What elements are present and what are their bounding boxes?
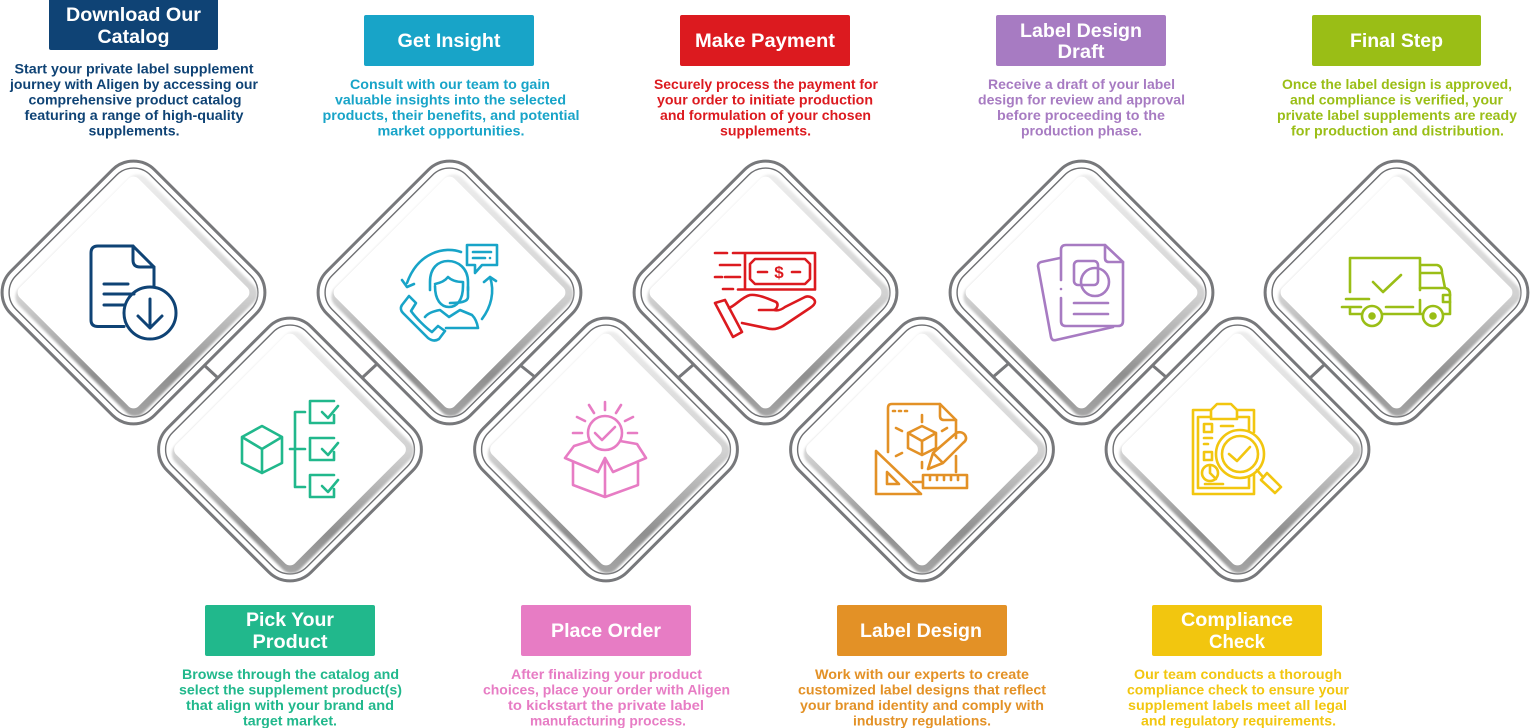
- icon: money in hand: $: [774, 263, 784, 282]
- heading button: Place Order: [551, 621, 662, 642]
- step 2: Pick Your Product: [146, 306, 434, 728]
- description: design for review and approval: [978, 92, 1185, 108]
- description: your brand identity and comply with: [800, 697, 1044, 713]
- heading button: Get Insight: [398, 31, 501, 52]
- diamond panel: [146, 306, 434, 593]
- description: Our team conducts a thorough: [1134, 666, 1342, 682]
- description: [1127, 666, 1350, 728]
- description: supplements.: [88, 122, 180, 138]
- description: and formulation of your chosen: [660, 107, 871, 123]
- description: for production and distribution.: [1291, 122, 1504, 138]
- description: and compliance is verified, your: [1290, 92, 1504, 108]
- icon: delivery truck: [1342, 258, 1450, 326]
- description: private label supplements are ready: [1277, 107, 1517, 123]
- step 5: Make Payment: [622, 15, 909, 436]
- description: Consult with our team to gain: [350, 76, 550, 92]
- diamond panel: [938, 149, 1225, 436]
- heading button: [205, 605, 375, 656]
- heading button: Draft: [1058, 42, 1105, 63]
- diamond panel: [462, 306, 750, 593]
- description: production phase.: [1021, 122, 1142, 138]
- description: supplements.: [720, 122, 811, 138]
- heading button: [837, 605, 1007, 656]
- description: Once the label design is approved,: [1282, 76, 1512, 92]
- step 1: Download Our Catalog: [0, 0, 277, 436]
- description: before proceeding to the: [997, 107, 1165, 123]
- diamond panel: [778, 306, 1066, 593]
- description: Browse through the catalog and: [182, 666, 399, 682]
- step 4: Place Order: [462, 306, 750, 728]
- description: products, their benefits, and potential: [322, 107, 580, 123]
- description: comprehensive product catalog: [28, 92, 242, 108]
- description: Receive a draft of your label: [988, 76, 1175, 92]
- description: [978, 76, 1185, 138]
- diamond panel: [1253, 149, 1536, 436]
- step 3: Get Insight: [306, 15, 593, 436]
- step 6: Label Design: [778, 306, 1066, 728]
- icon: label draft documents: [1038, 245, 1123, 340]
- description: compliance check to ensure your: [1127, 682, 1350, 698]
- description: [1277, 76, 1517, 138]
- heading button: [680, 15, 850, 66]
- diamond panel: [0, 149, 277, 436]
- heading button: Product: [252, 632, 328, 653]
- heading button: Check: [1209, 632, 1265, 653]
- description: Securely process the payment for: [654, 76, 879, 92]
- description: [798, 666, 1046, 728]
- description: that align with your brand and: [186, 697, 394, 713]
- icon: clipboard with magnifier: [1193, 404, 1281, 494]
- icon: design tools and cube: [876, 404, 967, 494]
- description: customized label designs that reflect: [798, 682, 1046, 698]
- description: [483, 666, 730, 728]
- description: [9, 60, 259, 138]
- description: journey with Aligen by accessing our: [9, 76, 259, 92]
- icon: support agent with phone: [401, 245, 497, 340]
- description: [322, 76, 580, 138]
- heading button: Label Design: [1020, 21, 1142, 42]
- description: [654, 76, 879, 138]
- heading button: [521, 605, 691, 656]
- description: choices, place your order with Aligen: [483, 682, 730, 698]
- heading button: Compliance: [1181, 610, 1293, 631]
- heading button: Download Our: [66, 5, 202, 26]
- heading button: [1152, 605, 1322, 656]
- heading button: [996, 15, 1166, 66]
- step 8: Compliance Check: [1094, 306, 1381, 728]
- diamond panel: [622, 149, 909, 436]
- heading button: Catalog: [98, 27, 170, 48]
- description: Start your private label supplement: [14, 60, 254, 76]
- description: supplement labels meet all legal: [1128, 697, 1347, 713]
- heading button: Final Step: [1350, 31, 1443, 52]
- heading button: Label Design: [860, 621, 982, 642]
- description: featuring a range of high-quality: [24, 107, 244, 123]
- heading button: [364, 15, 534, 66]
- diamond panel: [1094, 306, 1381, 593]
- description: select the supplement product(s): [179, 682, 402, 698]
- icon: open box with check: [565, 402, 646, 497]
- description: market opportunities.: [378, 122, 524, 138]
- description: Work with our experts to create: [815, 666, 1029, 682]
- description: your order to initiate production: [657, 92, 873, 108]
- icon: money in hand: [715, 253, 815, 337]
- heading button: [49, 0, 218, 50]
- step 9: Final Step: [1253, 15, 1536, 436]
- heading button: Make Payment: [695, 31, 836, 52]
- description: to kickstart the private label: [508, 697, 704, 713]
- diamond panel: [306, 149, 593, 436]
- description: After finalizing your product: [511, 666, 702, 682]
- icon: product cube with checklist: [242, 401, 338, 497]
- description: valuable insights into the selected: [335, 92, 566, 108]
- icon: document download: [91, 246, 176, 339]
- step 7: Label Design Draft: [938, 15, 1225, 436]
- heading button: [1312, 15, 1481, 66]
- description: [179, 666, 402, 728]
- heading button: Pick Your: [246, 610, 335, 631]
- connectors between diamonds: [204, 364, 1325, 378]
